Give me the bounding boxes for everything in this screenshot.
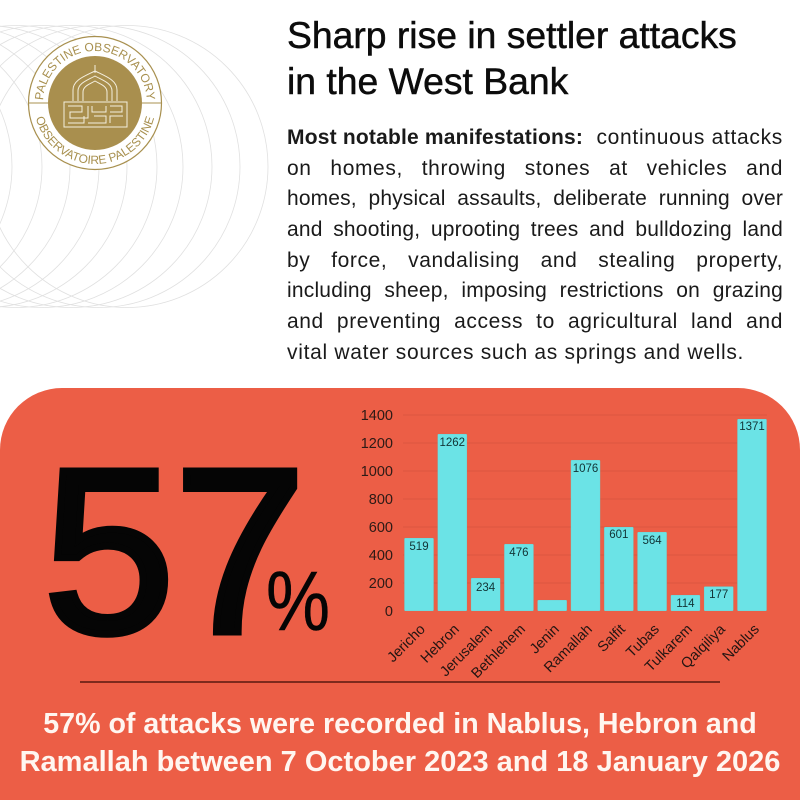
bar value labels: 519 bbox=[409, 541, 429, 553]
x axis labels bbox=[384, 621, 763, 682]
x axis labels: Tubas bbox=[623, 622, 663, 661]
x axis labels: Salfit bbox=[595, 622, 629, 656]
body text: most notable manifestations: including sheep, imposing restrictions on grazing bbox=[287, 279, 783, 302]
x axis labels: Tulkarem bbox=[642, 622, 696, 675]
body text: most notable manifestations: and shooting, uprooting trees and bulldozing land bbox=[287, 218, 783, 241]
x axis labels: Jerusalem bbox=[437, 622, 496, 680]
x axis labels: Qalqiliya bbox=[678, 621, 729, 672]
bar value labels: 1371 bbox=[739, 421, 765, 433]
caption: 57% of attacks were recorded in Nablus, Hebron and bbox=[43, 708, 757, 740]
bar value labels: 601 bbox=[609, 529, 628, 541]
x axis labels: Jenin bbox=[527, 622, 563, 657]
body text: most notable manifestations: by force, vandalising and stealing property, bbox=[287, 249, 783, 272]
body text: most notable manifestations: Most notable manifestations: bbox=[287, 126, 583, 149]
title: in the West Bank bbox=[287, 60, 568, 102]
y axis labels: 1400 bbox=[361, 408, 393, 424]
y axis labels: 1000 bbox=[361, 464, 393, 480]
bar value labels: 177 bbox=[709, 589, 728, 601]
y axis labels: 400 bbox=[369, 548, 393, 564]
y axis labels: 200 bbox=[369, 576, 393, 592]
body text: most notable manifestations: homes, physical assaults, deliberate running over bbox=[287, 187, 783, 210]
body text: most notable manifestations: and preventing access to agricultural land and bbox=[287, 310, 783, 333]
bar value labels: 234 bbox=[476, 582, 496, 594]
title: Sharp rise in settler attacks bbox=[287, 14, 737, 56]
body text: most notable manifestations: on homes, throwing stones at vehicles and bbox=[287, 157, 783, 180]
bar value labels: 1262 bbox=[440, 437, 465, 449]
body text: most notable manifestations bbox=[287, 126, 783, 364]
bar value labels: 564 bbox=[643, 535, 662, 547]
bar chart: attacks by governorate bbox=[361, 408, 767, 680]
caption: Ramallah between 7 October 2023 and 18 January 2026 bbox=[20, 746, 780, 778]
decorative circles and logo bbox=[0, 25, 268, 308]
bar value labels bbox=[409, 421, 765, 610]
logo: Palestine Observatory: PALESTINE OBSERVATORY bbox=[34, 42, 156, 100]
caption bbox=[20, 708, 780, 778]
body text: most notable manifestations: continuous attacks bbox=[596, 126, 783, 149]
title bbox=[287, 14, 737, 102]
x axis labels: Ramallah bbox=[541, 622, 596, 676]
x axis labels: Hebron bbox=[418, 622, 463, 666]
big number 57%: % bbox=[266, 554, 330, 648]
y axis labels bbox=[361, 408, 393, 620]
bar value labels: 114 bbox=[676, 598, 695, 610]
y axis labels: 1200 bbox=[361, 436, 393, 452]
bar value labels: 476 bbox=[509, 547, 528, 559]
logo: Palestine Observatory: OBSERVATOIRE PALESTINE bbox=[36, 116, 154, 164]
bars bbox=[404, 419, 767, 611]
y axis labels: 800 bbox=[369, 492, 393, 508]
x axis labels: Jericho bbox=[384, 622, 429, 666]
x axis labels: Nablus bbox=[720, 622, 763, 665]
bar value labels: 1076 bbox=[573, 463, 598, 475]
icon: dome and calligraphy bbox=[64, 65, 127, 127]
y axis labels: 600 bbox=[369, 520, 393, 536]
body text: most notable manifestations: vital water sources such as springs and wells. bbox=[287, 341, 744, 364]
y axis labels: 0 bbox=[385, 604, 393, 620]
logo: Palestine Observatory bbox=[28, 36, 162, 170]
panel: statistics bbox=[0, 388, 800, 800]
